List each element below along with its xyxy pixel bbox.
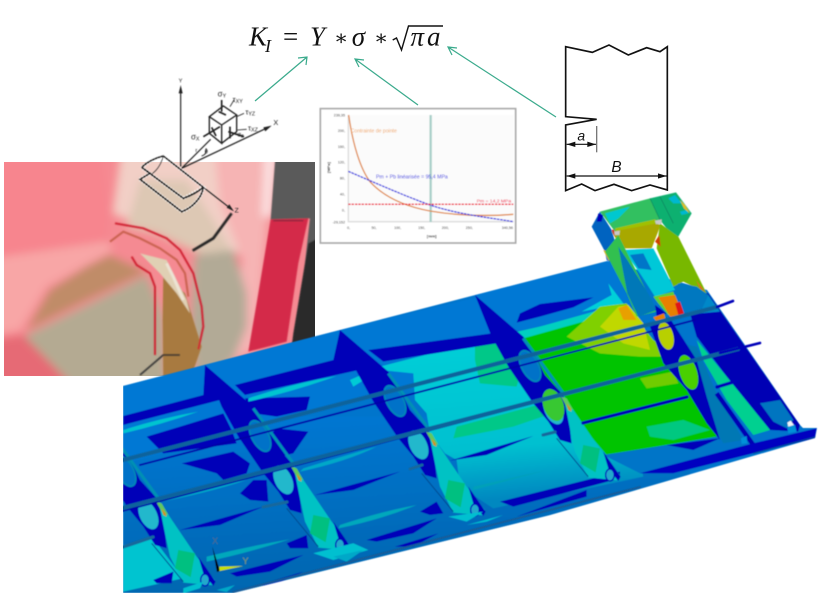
- plate with stress contours: [70, 255, 827, 593]
- dimension B: [567, 159, 667, 179]
- left and middle panels: [123, 328, 690, 593]
- formula: stress intensity factor: Y: [310, 22, 328, 52]
- chart labels: 200,: [442, 226, 449, 230]
- linearised stress line: [348, 171, 513, 222]
- chart labels: 50,: [371, 226, 377, 230]
- membrane stress line: [348, 202, 513, 206]
- axis and stress labels: σ: [191, 132, 196, 141]
- coordinate triad: [212, 536, 249, 572]
- right panel colour bands: [476, 261, 720, 474]
- axis and stress labels: θ: [205, 149, 209, 155]
- arrows from diagrams to formula: [255, 47, 556, 117]
- formula: stress intensity factor: =: [283, 22, 298, 52]
- dimension a: [567, 127, 596, 147]
- peak stress curve: [349, 115, 513, 215]
- axis and stress labels: τ: [233, 95, 236, 104]
- finite element stress model: [70, 192, 827, 593]
- coordinate axes: [179, 85, 272, 211]
- chart labels: 80,: [340, 177, 345, 181]
- chart labels: 150,: [418, 226, 425, 230]
- axis and stress labels: r: [195, 148, 197, 154]
- formula: stress intensity factor: ∗: [374, 26, 388, 50]
- axis and stress labels: σ: [237, 133, 241, 139]
- dimension a: a: [577, 127, 585, 143]
- through-thickness marker: [427, 115, 434, 222]
- chart labels: [MPa]: [326, 162, 331, 173]
- chart labels: 340,56: [502, 226, 513, 230]
- coordinate triad: Y: [242, 556, 249, 566]
- axis and stress labels: σ: [218, 90, 223, 99]
- rib between middle and right panels: [475, 295, 621, 481]
- longitudinal stiffeners: [123, 301, 760, 592]
- chart labels: [326, 114, 513, 238]
- axis and stress labels: YZ: [248, 112, 256, 118]
- photo of cracked weld: [4, 162, 315, 376]
- weld bead and crack outlines: [110, 213, 303, 380]
- axis and stress labels: Z: [241, 134, 244, 139]
- axis and stress labels: XY: [236, 99, 243, 105]
- chart labels: 239,35: [334, 114, 345, 118]
- chart labels: Contrainte de pointe: [351, 128, 397, 134]
- dark steel edge: [248, 162, 315, 352]
- formula: stress intensity factor: π: [410, 22, 426, 52]
- chart labels: [mm]: [427, 233, 437, 238]
- chart labels: Pm = 14,2 MPa: [477, 198, 511, 204]
- chart labels: 0,: [342, 209, 345, 213]
- formula: stress intensity factor: σ: [352, 22, 367, 52]
- chart labels: 160,: [338, 145, 345, 149]
- chart labels: 200,: [338, 129, 345, 133]
- formula: stress intensity factor: [248, 22, 443, 56]
- formula: stress intensity factor: K: [248, 22, 269, 52]
- notched plate diagram: [566, 45, 667, 191]
- axis and stress labels: Y: [179, 79, 183, 85]
- dimension B: B: [611, 159, 622, 176]
- axis and stress labels: Z: [235, 208, 239, 215]
- chart labels: 0,: [347, 226, 350, 230]
- axis and stress labels: X: [196, 136, 200, 142]
- axis and stress labels: τ: [248, 124, 251, 133]
- axis and stress labels: [179, 79, 278, 215]
- axis and stress labels: τ: [245, 108, 248, 117]
- formula: stress intensity factor: a: [427, 22, 440, 52]
- axis and stress labels: Y: [223, 94, 227, 100]
- soft photo colour areas: [4, 162, 311, 376]
- crack-tip stress element axes diagram: [140, 79, 278, 215]
- chart labels: Pm + Pb linéarisée = 95,4 MPa: [376, 175, 448, 181]
- tower support with hot spots: [592, 192, 708, 322]
- chart labels: -29,152: [333, 220, 345, 224]
- chart labels: 40,: [340, 193, 345, 197]
- coordinate triad: X: [212, 536, 219, 546]
- axis and stress labels: XZ: [251, 128, 259, 134]
- stress cube: [203, 100, 247, 143]
- chart labels: 120,: [338, 161, 345, 165]
- chart labels: 250,: [466, 226, 473, 230]
- formula: stress intensity factor: I: [264, 36, 272, 56]
- right panel, hot zone: [538, 283, 817, 473]
- formula: stress intensity factor: ∗: [334, 26, 348, 50]
- notch body: [140, 156, 203, 212]
- chart labels: 100,: [394, 226, 401, 230]
- stress distribution chart: [320, 109, 516, 243]
- axis and stress labels: X: [273, 118, 278, 127]
